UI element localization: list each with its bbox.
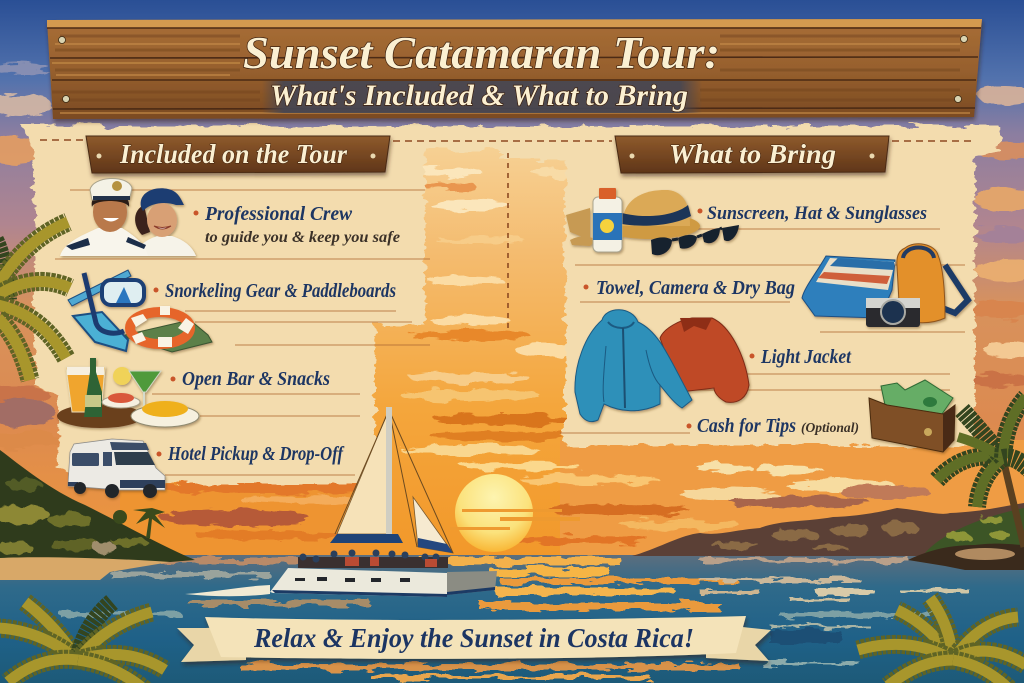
island left [0,450,195,580]
sails [335,407,453,553]
right palm tree [937,397,1024,547]
bullet [194,210,198,216]
label: sunscreen: Sunscreen, Hat & Sunglasses [707,203,927,224]
icon: sunscreen, hat, sunglasses [566,188,739,255]
label: optional: (Optional) [801,420,859,435]
small palm on island [113,508,165,538]
bottom-left palm [0,602,165,683]
icon: crew [60,178,196,256]
label: open bar: Open Bar & Snacks [182,368,330,390]
cloud bands across sun [450,509,580,530]
island right [632,503,1024,570]
label: cash for tips: Cash for Tips [697,416,796,437]
center sunset glow with clouds [120,128,1024,558]
label: professional crew: Professional Crew [204,203,353,225]
wood plank [47,19,982,119]
sea [0,555,1024,683]
bottom-right palm [858,598,1024,683]
parchment panels [22,126,1000,484]
bullet [170,376,176,382]
heading board [86,136,390,173]
label: towel camera dry bag: Towel, Camera & Dry Bag [596,278,795,299]
bullet [698,208,702,214]
heading board: What to Bring [669,139,836,169]
panel: included on the tour [57,136,400,498]
bullet [750,354,754,358]
closing banner [177,616,771,662]
label: light jacket: Light Jacket [760,346,852,368]
icon: towel, camera, dry bag [802,244,968,327]
nails [58,36,968,102]
heading board [615,136,889,173]
title text: Sunset Catamaran Tour: [243,27,720,78]
hull [270,568,497,597]
sun [455,474,533,552]
main title board [47,19,982,119]
bullet [154,288,158,292]
ribbon body [205,616,746,659]
subtitle backing band [262,81,702,113]
icon: snorkel, fins and ring [68,270,212,352]
wake [185,585,270,596]
canopy [330,534,403,543]
catamaran [185,407,497,597]
icon: wallet with cash [869,380,955,452]
parchment fold lines [55,190,965,475]
dashed stitching [40,140,975,332]
heading board: Included on the Tour [119,139,347,169]
subtitle text: What's Included & What to Bring [270,79,688,112]
label: snorkeling gear: Snorkeling Gear & Paddleboards [165,281,396,302]
bullet [584,284,588,290]
ribbon tails [177,626,246,662]
icon: jackets [575,310,749,422]
passengers [298,550,448,568]
label: hotel pickup: Hotel Pickup & Drop-Off [167,444,345,465]
icon: drinks and snacks [57,358,199,428]
bullet [686,424,692,428]
label: crew note: to guide you & keep you safe [205,229,400,246]
panel: what to bring [566,136,968,452]
icon: van [68,439,165,498]
banner text: Relax & Enjoy the Sunset in Costa Rica! [253,622,694,653]
bullet [156,452,162,456]
left palm tree [0,222,70,380]
